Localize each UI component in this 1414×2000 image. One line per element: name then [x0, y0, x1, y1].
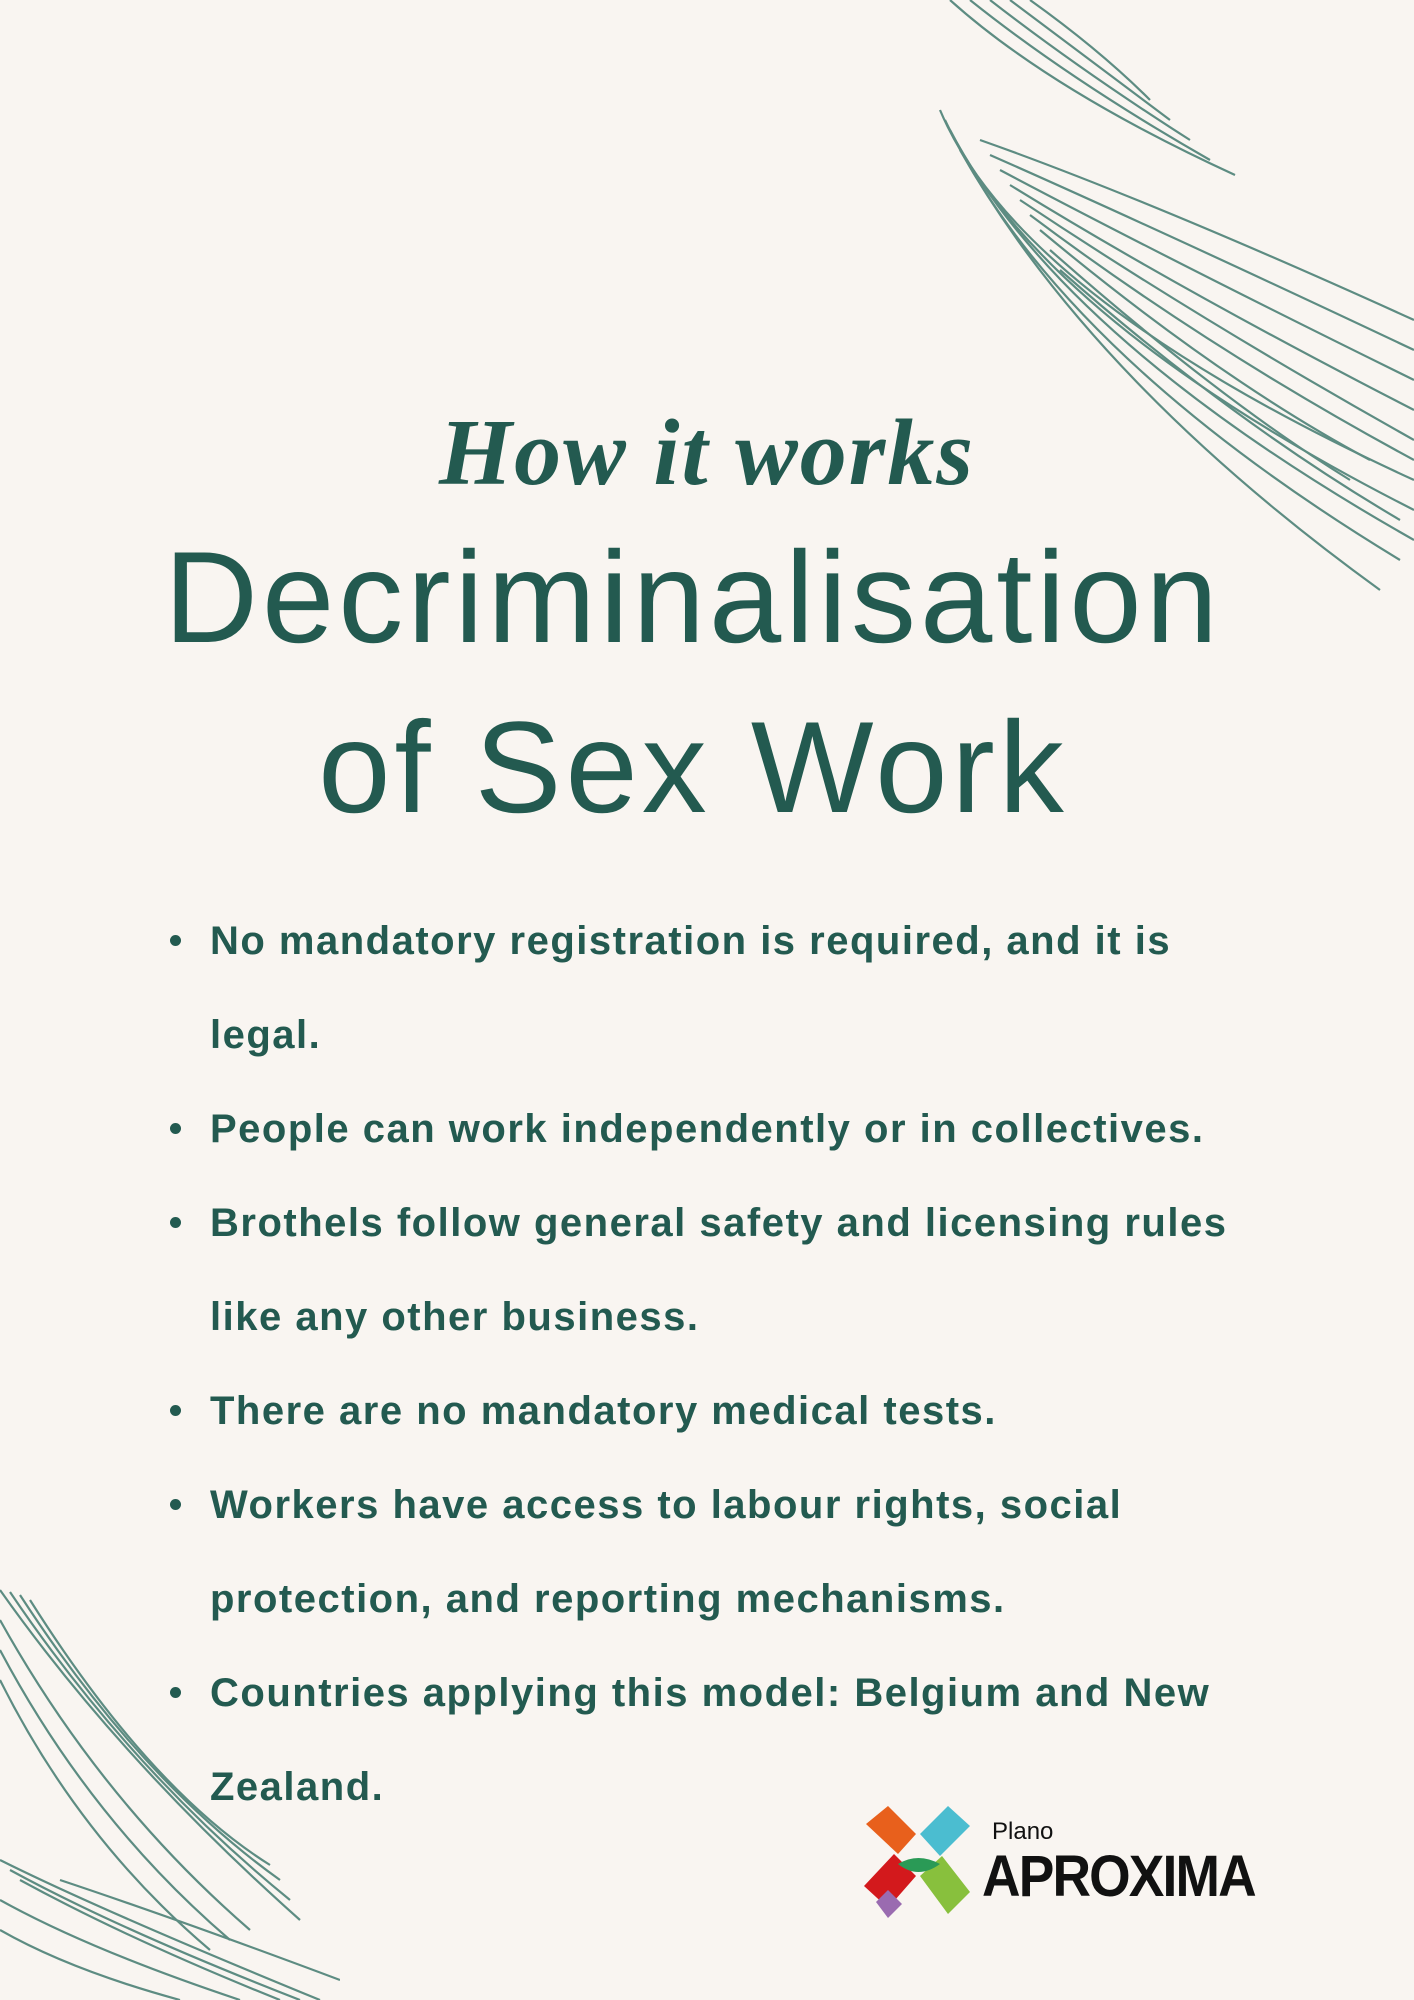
logo: Plano Aproxima: APROXIMA	[982, 1844, 1255, 1909]
bullet list: legal.	[210, 1013, 321, 1057]
logo: Plano Aproxima	[864, 1806, 1256, 1918]
decoration: bottom left strokes	[0, 1589, 340, 2000]
bullet list: People can work independently or in collectives.	[210, 1107, 1204, 1151]
bullet list: There are no mandatory medical tests.	[210, 1389, 997, 1433]
bullet list: Zealand.	[210, 1765, 384, 1809]
heading: script subtitle: How it works	[439, 401, 975, 505]
bullet list: No mandatory registration is required, and it is	[210, 919, 1171, 963]
icon: colorful X mark	[864, 1806, 970, 1918]
logo text: Plano	[992, 1818, 1053, 1845]
bullet list: Brothels follow general safety and licensing rules	[210, 1201, 1227, 1245]
bullet list: Workers have access to labour rights, social	[210, 1483, 1122, 1527]
title: Decriminalisation	[164, 524, 1222, 670]
bullet list: protection, and reporting mechanisms.	[210, 1577, 1006, 1621]
bullet list	[170, 919, 1227, 1809]
decoration: top right strokes	[939, 0, 1414, 591]
bullet list: Countries applying this model: Belgium and New	[210, 1671, 1210, 1715]
title	[164, 524, 1222, 840]
bullet list: like any other business.	[210, 1295, 700, 1339]
title: of Sex Work	[318, 694, 1068, 840]
